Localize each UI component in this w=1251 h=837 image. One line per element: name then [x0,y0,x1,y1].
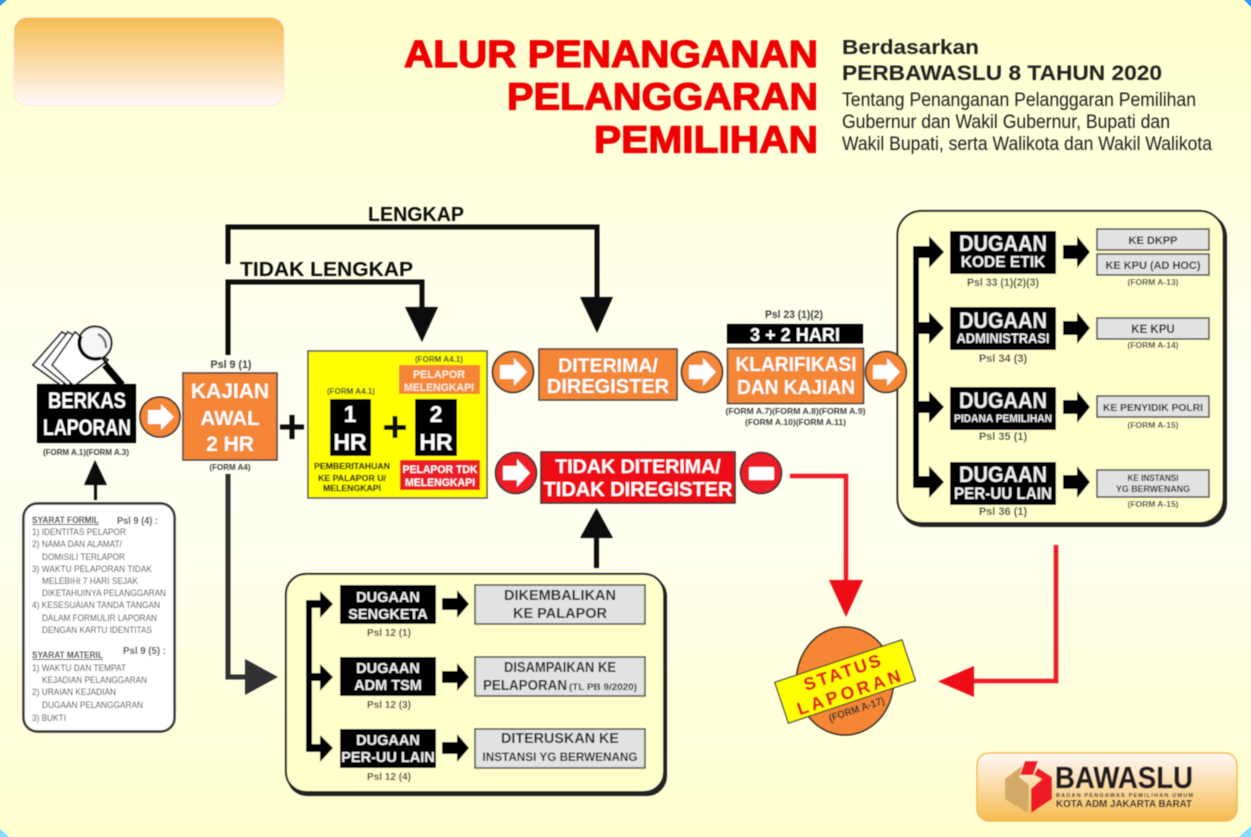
row: per-uu lain: INSTANSI YG BERWENANG [482,750,638,764]
arrow: circle orange 2 [492,352,534,392]
row: sengketa: DIKEMBALIKAN [504,588,616,604]
panel: syarat [24,504,174,732]
syarat materil: DUGAAN PELANGGARAN [42,700,143,710]
panel: yellow timing box [308,351,487,498]
box: 2 HR: 2 [430,401,442,427]
box: pelapor tdk melengkapi [400,460,480,490]
corner accent: top left [0,0,7,6]
note: pemberitahuan [314,461,390,493]
syarat materil: 2) URAIAN KEJADIAN [32,687,116,697]
row: pidana pemilihan [913,387,1209,443]
title [404,34,818,162]
syarat formil: SYARAT FORMIL [32,515,99,526]
badge: status laporan [775,627,920,737]
syarat materil: 1) WAKTU DAN TEMPAT [32,663,126,673]
box: kajian awal [183,359,277,472]
row: administrasi [913,307,1209,365]
subtitle: Wakil Bupati, serta Walikota dan Wakil Walikota [842,134,1212,155]
panel: yellow timing box: (FORM A4.1) [415,355,463,364]
connector [306,604,312,748]
arrow: circle orange 3 [682,352,722,392]
row: per-uu lain: Psl 36 (1) [979,506,1027,518]
arrow: LENGKAP: LENGKAP [368,204,464,226]
icon: no entry [740,452,782,494]
row: per-uu lain: KE INSTANSI [1128,473,1178,483]
box: pelapor tdk melengkapi: MELENGKAPI [405,477,475,489]
arrow: kajian to bottom panel [228,474,278,695]
row: per-uu lain: Psl 12 (4) [367,772,411,783]
row: pidana pemilihan: Psl 35 (1) [979,431,1027,443]
arrow: circle orange 1 [140,397,180,437]
badge: status laporan: STATUS [801,650,883,695]
arrow: up to tidak diterima [580,508,613,568]
box: tidak diterima: TIDAK DITERIMA/ [555,456,721,478]
syarat materil [32,646,166,723]
row: adm tsm [306,657,645,711]
syarat formil: 2) NAMA DAN ALAMAT/ [32,539,122,549]
box: klarifikasi: (FORM A.10)(FORM A.11) [745,418,846,427]
arrow: TIDAK LENGKAP [228,259,438,355]
box: pelapor melengkapi: PELAPOR [413,369,465,381]
box: berkas laporan [37,384,136,457]
box: kajian awal: (FORM A4) [210,463,251,472]
row: per-uu lain [306,729,645,783]
row: sengketa: KE PALAPOR [513,606,608,622]
row: pidana pemilihan: DUGAAN [959,388,1047,413]
syarat formil: 4) KESESUAIAN TANDA TANGAN [32,600,160,610]
syarat formil: 3) WAKTU PELAPORAN TIDAK [32,564,153,574]
note: pemberitahuan: KE PALAPOR U/ [318,473,387,483]
row: adm tsm: Psl 12 (3) [367,700,411,711]
row: per-uu lain: DITERUSKAN KE [501,731,619,747]
row: per-uu lain: DUGAAN [959,462,1047,487]
row: administrasi: KE KPU [1131,324,1175,336]
box: 1 HR: 1 [344,401,357,427]
box: berkas laporan: (FORM A.1)(FORM A.3) [43,448,129,457]
box: 2 HR [415,399,457,456]
subtitle: Berdasarkan [842,37,979,59]
syarat formil: DIKETAHUINYA PELANGGARAN [42,588,166,598]
syarat materil: Psl 9 (5) : [123,646,166,657]
row: adm tsm: DISAMPAIKAN KE [504,660,616,676]
logo: bawaslu: KOTA ADM JAKARTA BARAT [1056,799,1192,810]
row: administrasi: (FORM A-14) [1128,341,1179,350]
box: 1 HR [330,399,371,456]
row: kode etik: KODE ETIK [961,254,1046,271]
syarat formil: 1) IDENTITAS PELAPOR [32,527,126,537]
logo: bawaslu [977,753,1237,821]
title: PELANGGARAN [507,76,818,118]
box: tidak diterima: TIDAK DIREGISTER [544,479,733,501]
title: ALUR PENANGANAN [404,34,818,76]
arrow: red from right panel to status [938,545,1056,697]
box: diterima: DIREGISTER [547,376,670,398]
box: klarifikasi: Psl 23 (1)(2) [765,309,823,321]
row: kode etik: (FORM A-13) [1128,278,1179,287]
connector [913,246,919,482]
panel: dugaan bawah [286,574,667,796]
row: kode etik [913,229,1209,289]
syarat formil: DOMISILI TERLAPOR [42,552,125,562]
box: pelapor melengkapi [399,365,480,394]
box: diterima [539,349,677,400]
row: adm tsm: (TL PB 9/2020) [569,682,637,692]
row: per-uu lain: PER-UU LAIN [341,750,435,766]
icon: plus [280,415,304,439]
corner accent: bottom right [1239,826,1251,837]
badge: status laporan: (FORM A-17) [827,695,886,725]
panel: yellow timing box: (FORM A4.1) [327,387,375,396]
icon: ballot box [1005,761,1052,813]
box: 1 HR: HR [333,429,367,455]
row: sengketa: DUGAAN [356,590,420,606]
arrow: circle orange 4 [866,352,906,392]
syarat formil: DALAM FORMULIR LAPORAN [42,613,157,623]
note: pemberitahuan: PEMBERITAHUAN [314,461,390,471]
syarat formil: DENGAN KARTU IDENTITAS [42,625,152,635]
row: pidana pemilihan: KE PENYIDIK POLRI [1103,403,1203,414]
subtitle: Gubernur dan Wakil Gubernur, Bupati dan [842,112,1170,133]
row: per-uu lain [913,462,1209,518]
corner accent: bottom left [0,829,9,837]
box: kajian awal: Psl 9 (1) [210,359,252,371]
logo: bawaslu: BAWASLU [1055,760,1193,795]
row: kode etik: Psl 33 (1)(2)(3) [967,277,1039,289]
box: klarifikasi: KLARIFIKASI [736,353,856,376]
box: klarifikasi: (FORM A.7)(FORM A.8)(FORM A.9) [726,407,866,416]
row: sengketa: SENGKETA [348,607,428,623]
corner accent: top right [1244,0,1251,7]
box: kajian awal: AWAL [200,407,260,430]
row: administrasi: Psl 34 (3) [979,353,1027,365]
subtitle [842,37,1212,155]
syarat materil: KEJADIAN PELANGGARAN [42,675,147,685]
box: kajian awal: KAJIAN [191,380,269,403]
box: klarifikasi [726,309,866,427]
box: berkas laporan: BERKAS [48,388,126,413]
row: per-uu lain: PER-UU LAIN [954,484,1052,503]
syarat formil: Psl 9 (4) : [117,516,158,527]
row: per-uu lain: (FORM A-15) [1128,500,1179,509]
row: adm tsm: DUGAAN [356,661,420,677]
box: berkas laporan: LAPORAN [43,415,131,440]
box: pelapor melengkapi: MELENGKAPI [404,382,474,394]
note: pemberitahuan: MELENGKAPI [323,483,381,493]
arrow: LENGKAP [228,204,613,333]
icon: plus small [384,416,406,438]
row: kode etik: KE DKPP [1128,235,1178,247]
box: klarifikasi: DAN KAJIAN [737,376,855,399]
row: administrasi: DUGAAN [959,308,1047,333]
row: adm tsm: ADM TSM [354,678,422,694]
row: kode etik: KE KPU (AD HOC) [1106,260,1201,272]
row: pidana pemilihan: (FORM A-15) [1128,421,1179,430]
logo: bawaslu: BADAN PENGAWAS PEMILIHAN UMUM [1056,793,1193,799]
row: pidana pemilihan: PIDANA PEMILIHAN [954,413,1052,425]
empty gradient placeholder panel [14,17,284,106]
arrow: red to status [790,476,863,617]
title: PEMILIHAN [594,120,818,162]
panel: dugaan kanan [898,211,1227,527]
box: diterima: DITERIMA/ [558,355,658,377]
box: pelapor tdk melengkapi: PELAPOR TDK [402,464,478,476]
row: sengketa: Psl 12 (1) [367,628,411,639]
box: kajian awal: 2 HR [206,433,254,456]
subtitle: Tentang Penanganan Pelanggaran Pemilihan [842,90,1196,111]
box: tidak diterima [541,452,735,503]
syarat materil: SYARAT MATERIL [32,650,103,661]
subtitle: PERBAWASLU 8 TAHUN 2020 [842,62,1162,85]
arrow: syarat to berkas [84,460,107,500]
row: sengketa [306,585,645,639]
arrow: circle red [496,452,536,494]
row: per-uu lain: DUGAAN [356,733,420,749]
box: klarifikasi: 3 + 2 HARI [750,325,840,345]
syarat formil [32,515,166,635]
row: adm tsm: PELAPORAN [483,678,567,694]
row: kode etik: DUGAAN [959,231,1047,256]
row: per-uu lain: YG BERWENANG [1116,484,1190,494]
syarat materil: 3) BUKTI [32,713,66,723]
box: 2 HR: HR [419,429,453,455]
row: administrasi: ADMINISTRASI [956,331,1050,346]
icon: documents and magnifier [33,326,122,386]
syarat formil: MELEBIHI 7 HARI SEJAK [42,576,139,586]
badge: status laporan: LAPORAN [794,666,903,719]
arrow: TIDAK LENGKAP: TIDAK LENGKAP [240,259,413,281]
